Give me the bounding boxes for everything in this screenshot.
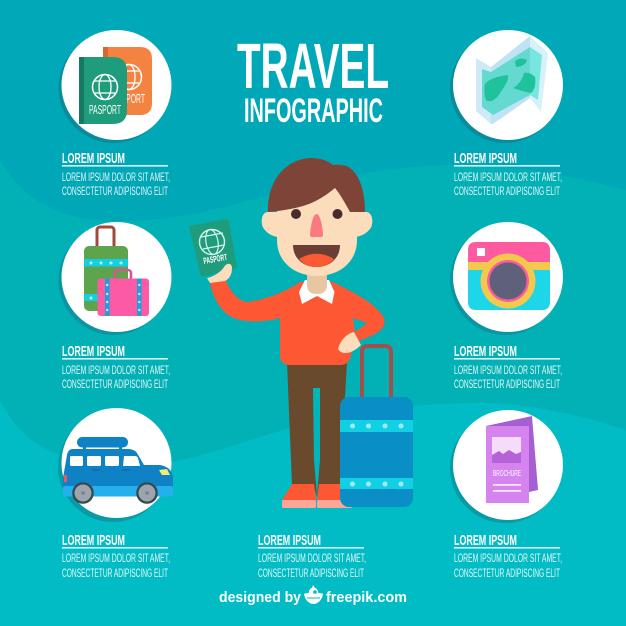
caption: car: CONSECTETUR ADIPISCING ELIT	[62, 568, 168, 580]
caption: passports	[62, 151, 170, 198]
icon: green suitcase	[84, 227, 128, 311]
panel: camera	[450, 222, 563, 335]
ears	[262, 212, 372, 237]
footer: credit: designed by	[219, 589, 302, 606]
caption: car	[62, 533, 170, 580]
caption: center: LOREM IPSUM	[258, 533, 321, 549]
nose	[310, 214, 323, 237]
caption: luggage	[62, 344, 170, 391]
panel: brochure	[450, 410, 563, 523]
caption: luggage: CONSECTETUR ADIPISCING ELIT	[62, 379, 168, 391]
caption: car: LOREM IPSUM	[62, 533, 125, 549]
caption: center: LOREM IPSUM DOLOR SIT AMET,	[258, 553, 366, 565]
hand on hip	[338, 332, 361, 353]
footer: credit: freepik.com	[326, 589, 407, 606]
panel: car	[58, 408, 173, 522]
icon: brochure: BROCHURE	[493, 469, 521, 478]
icon: held passport	[189, 219, 237, 277]
eyes	[291, 209, 342, 219]
panel: passports	[58, 30, 172, 143]
icon: freepik logo	[304, 585, 323, 604]
collar	[299, 280, 334, 304]
icon: blue suitcase	[340, 346, 413, 507]
sweater	[210, 279, 385, 365]
footer: credit	[219, 585, 407, 606]
icon: folded map	[476, 36, 548, 124]
caption: center	[258, 533, 366, 580]
icon: green passport: PASPORT	[89, 103, 121, 117]
icon: pink suitcase	[98, 270, 149, 316]
panel: luggage	[58, 222, 172, 335]
legs	[287, 362, 347, 497]
character: traveller	[189, 158, 385, 508]
neck	[307, 270, 327, 294]
icon: car	[63, 437, 173, 504]
caption: camera	[454, 344, 562, 391]
caption: passports: LOREM IPSUM	[62, 151, 125, 167]
mouth	[293, 245, 340, 267]
gap between legs	[313, 388, 320, 497]
caption: passports: CONSECTETUR ADIPISCING ELIT	[62, 186, 168, 198]
face	[277, 180, 357, 276]
caption: center: CONSECTETUR ADIPISCING ELIT	[258, 568, 364, 580]
caption: luggage: LOREM IPSUM	[62, 344, 125, 360]
title	[237, 30, 389, 130]
caption: brochure: LOREM IPSUM	[454, 533, 517, 549]
icon: orange passport: PASPORT	[113, 92, 145, 106]
hair	[268, 158, 365, 212]
caption: car: LOREM IPSUM DOLOR SIT AMET,	[62, 553, 170, 565]
caption: luggage: LOREM IPSUM DOLOR SIT AMET,	[62, 365, 170, 377]
panel: map	[450, 30, 563, 143]
caption: map: LOREM IPSUM	[454, 151, 517, 167]
icon: camera	[468, 242, 550, 310]
hand holding passport	[207, 264, 232, 283]
shoes	[282, 484, 352, 508]
icon: held passport: PASPORT	[203, 252, 228, 266]
caption: passports: LOREM IPSUM DOLOR SIT AMET,	[62, 172, 170, 184]
title: TRAVEL	[237, 30, 389, 102]
caption: camera: LOREM IPSUM	[454, 344, 517, 360]
caption: brochure	[454, 533, 562, 580]
title: INFOGRAPHIC	[244, 92, 383, 130]
caption: map	[454, 151, 562, 198]
